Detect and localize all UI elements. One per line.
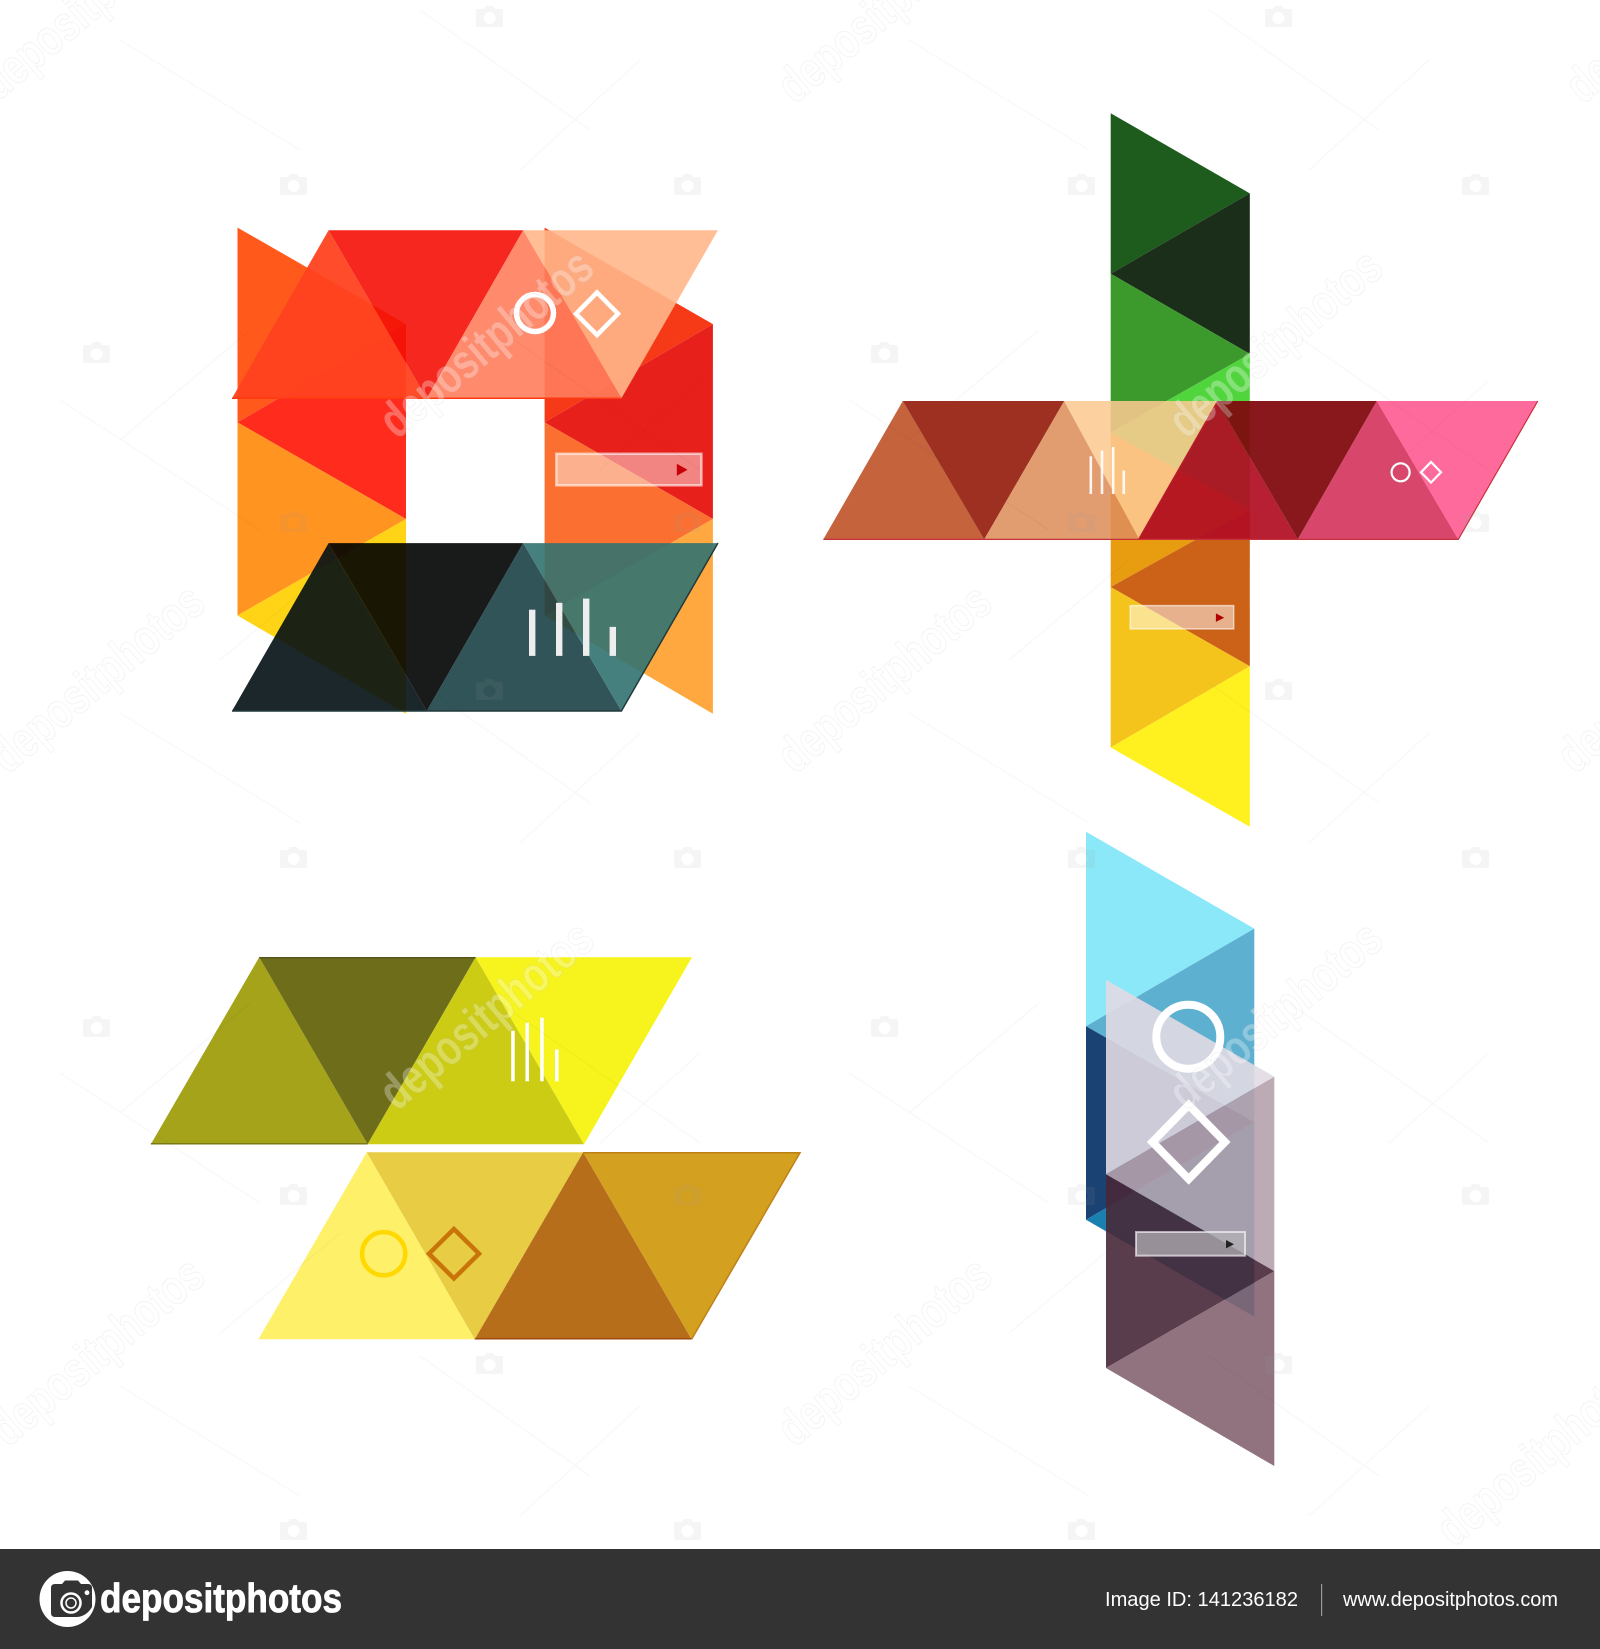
button with arrow (1136, 1232, 1245, 1256)
horizontal band red and pink (1138, 401, 1538, 539)
icon: diamond (429, 1229, 479, 1278)
icon: circle (1392, 463, 1410, 481)
upper olive and yellow band (151, 957, 692, 1144)
lower yellow and amber band (258, 1152, 800, 1339)
panel: blue and grey vertical shape (1086, 832, 1274, 1466)
panel: yellow z shape (151, 957, 800, 1339)
website url: www.depositphotos.com (1342, 1589, 1558, 1611)
watermark text: depositphotos (766, 573, 1002, 783)
blue strip (1086, 832, 1254, 1317)
watermark text: depositphotos (368, 238, 604, 448)
footer bar (0, 1549, 1600, 1649)
bottom dark band (232, 543, 718, 711)
icon: diamond (1152, 1105, 1225, 1179)
grey strip (1106, 980, 1274, 1466)
image id: Image ID: 141236182 (1105, 1589, 1298, 1611)
left vertical strip (238, 228, 406, 714)
icon: circle (516, 294, 554, 332)
horizontal band orange (823, 401, 1219, 539)
icon: diamond (576, 292, 618, 335)
panel: cross shape (823, 113, 1538, 827)
bar chart icon (511, 1018, 558, 1081)
logo wordmark: depositphotos (100, 1575, 342, 1621)
icon: circle (362, 1232, 405, 1275)
bar chart icon (529, 599, 616, 656)
watermark text: depositphotos (1157, 238, 1393, 448)
right vertical strip (545, 228, 713, 714)
icon: logo camera (40, 1571, 96, 1627)
bar chart icon (1090, 447, 1125, 494)
watermark text: depositphotos (766, 1246, 1002, 1456)
button with arrow (556, 454, 701, 485)
divider (1321, 1584, 1322, 1616)
panel: red and dark square shape (232, 228, 718, 714)
vertical green to yellow strip (1111, 113, 1250, 827)
watermark text: depositphotos (368, 910, 604, 1120)
top red band (232, 230, 718, 398)
button with arrow (1130, 606, 1234, 629)
watermark text: depositphotos (1157, 910, 1393, 1120)
icon: circle (1156, 1005, 1220, 1069)
icon: diamond (1421, 462, 1441, 483)
